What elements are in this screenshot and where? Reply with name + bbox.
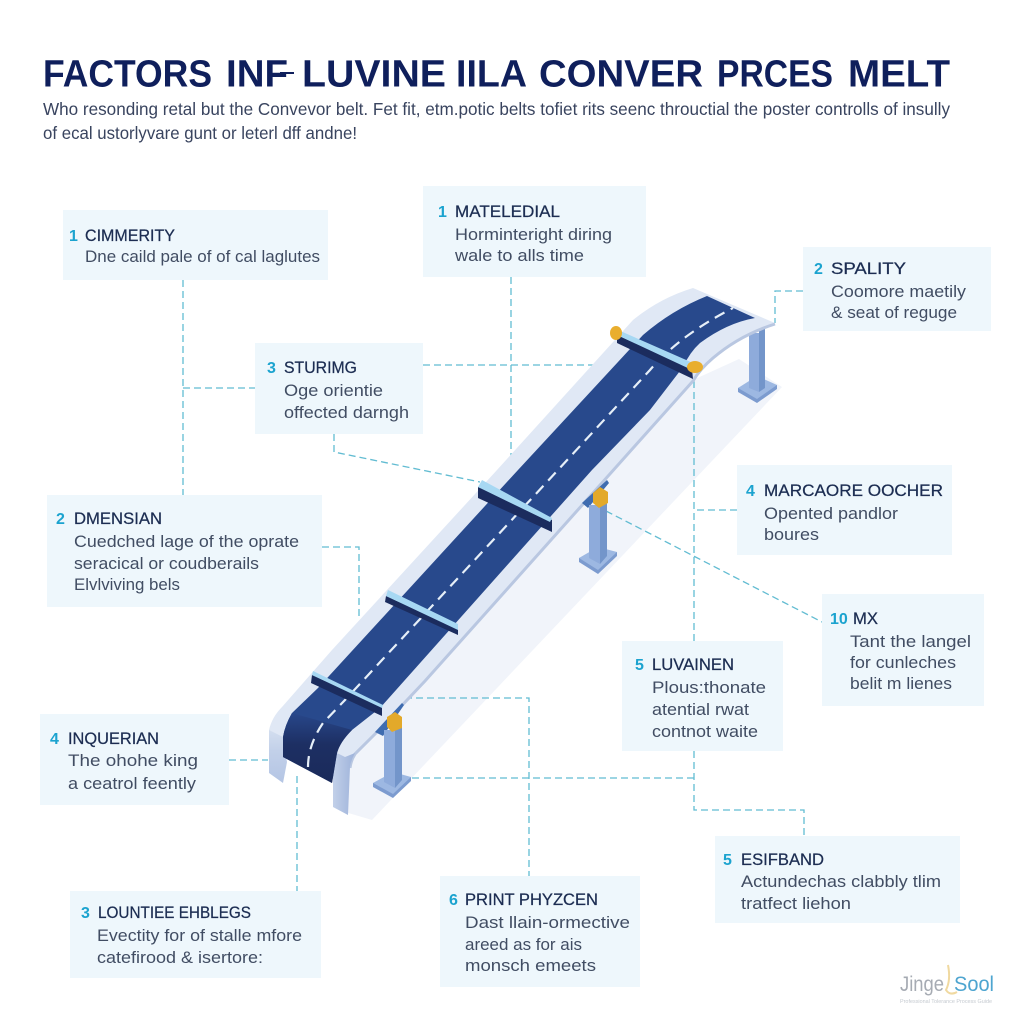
panel: 3 Lountiee Ehblegs: catefirood & isertore: [97,948,263,967]
panel: 3 Sturimg: Oge orientie [284,381,383,400]
panel: 2 Spality [803,247,991,331]
panel: 5 Esifband [715,836,960,923]
panel: 3 Lountiee Ehblegs [70,891,321,978]
title [43,54,950,96]
panel: 2 Spality: & seat of reguge [831,303,957,322]
panel: 10 MX: for cunleches [850,653,956,672]
cross bar 4 [617,330,693,379]
logo [900,965,994,1005]
title: INF [226,54,288,96]
panel: 3 Lountiee Ehblegs: LOUNTIEE EHBLEGS [98,903,251,922]
panel: 3 Sturimg: 3 [267,360,276,377]
panel: 5 Luvainen: atential rwat [652,700,749,719]
panel: 3 Sturimg: STURIMG [284,358,357,377]
panel: 5 Esifband: ESIFBAND [741,850,824,869]
panel: 5 Esifband: tratfect liehon [741,894,851,913]
logo: Professional Tolerance Process Guide [900,999,992,1005]
frame left post [269,730,287,783]
panel: 6 Print Phyzcen: Dast llain-ormective [465,913,630,932]
panel: 1 Mateledial [423,186,646,277]
panel: 6 Print Phyzcen: monsch emeets [465,956,596,975]
panel: 5 Luvainen: 5 [635,657,644,674]
panel: 2 Dmensian: Cuedched lage of the oprate [74,532,299,551]
panel: 2 Dmensian: DMENSIAN [74,509,162,528]
panel: 10 MX [822,594,984,706]
panel: 10 MX: belit m lienes [850,674,952,693]
title: FACTORS [43,54,212,96]
panel: 4 Marcaore Oocher: 4 [746,483,755,500]
cross bar 2 [385,590,458,635]
panel: 10 MX: MX [853,609,878,628]
belt end shading [283,713,352,783]
panel: 6 Print Phyzcen: 6 [449,892,458,909]
panel: 2 Spality: SPALITY [831,259,906,278]
logo: Jinge [900,973,944,996]
panel: 3 Lountiee Ehblegs: Evectity for of stalle mfore [97,926,302,945]
panel: 4 Inquerian: a ceatrol feently [68,774,197,793]
title: LUVINE [302,54,446,96]
panel: 2 Spality: Coomore maetily [831,282,967,301]
panel: 4 Inquerian [40,714,229,805]
panel: 1 Cimmerity: 1 [69,228,78,245]
panel: 4 Marcaore Oocher: boures [764,525,819,544]
navy belt surface [283,296,755,783]
gold fasteners on top bar [610,326,703,373]
panel: 5 Esifband: 5 [723,852,732,869]
title: CONVER [539,54,703,96]
panel: 1 Mateledial: 1 [438,204,447,221]
panel: 4 Marcaore Oocher: MARCAORE OOCHER [764,481,943,500]
panel: 2 Dmensian: 2 [56,511,65,528]
panel: 1 Mateledial: Horminteright diring [455,225,612,244]
panel: 10 MX: 10 [830,611,848,628]
subtitle: of ecal ustorlyvare gunt or leterl dff andne! [43,123,357,143]
cross bar 3 [478,480,552,532]
belt frame surface [269,288,775,770]
panel: 4 Inquerian: INQUERIAN [68,729,159,748]
panel: 6 Print Phyzcen [440,876,640,987]
panel: 2 Dmensian: Elvlviving bels [74,575,180,594]
panel: 5 Luvainen: LUVAINEN [652,655,734,674]
cross bar 1 [311,671,383,716]
panel: 3 Sturimg [255,343,423,434]
panel: 10 MX: Tant the langel [850,632,971,651]
panel: 1 Mateledial: MATELEDIAL [455,202,560,221]
frame right post [333,753,355,815]
floor shadow [345,359,782,820]
panel: 4 Marcaore Oocher: Opented pandlor [764,504,898,523]
panel: 4 Inquerian: The ohohe king [68,751,198,770]
panel: 1 Cimmerity: Dne caild pale of of cal laglutes [85,247,320,266]
panel: 5 Luvainen: contnot waite [652,722,758,741]
panel: 1 Cimmerity [63,210,328,280]
panel: 2 Dmensian: seracical or coudberails [74,554,259,573]
panel: 2 Dmensian [47,495,322,607]
centre dashed line [308,308,733,767]
front support leg [373,703,411,798]
subtitle [43,99,950,143]
panel: 4 Inquerian: 4 [50,731,59,748]
title: MELT [848,54,950,96]
panel: 6 Print Phyzcen: PRINT PHYZCEN [465,890,598,909]
title: IILA [456,54,527,96]
back support leg [738,327,777,403]
panel: 3 Sturimg: offected darngh [284,403,409,422]
panel: 1 Cimmerity: CIMMERITY [85,226,175,245]
panel: 6 Print Phyzcen: areed as for ais [465,935,582,954]
panel: 5 Esifband: Actundechas clabbly tlim [741,872,941,891]
conveyor belt illustration [269,288,777,815]
connector lines [183,277,822,891]
panel: 4 Marcaore Oocher [737,465,952,555]
panel: 3 Lountiee Ehblegs: 3 [81,905,90,922]
panel: 1 Mateledial: wale to alls time [454,246,584,265]
logo: Sool [954,973,994,996]
middle support leg [579,480,617,574]
frame outer edge [350,324,775,768]
subtitle: Who resonding retal but the Convevor belt. Fet fit, etm.potic belts tofiet rits seenc throuctial the poster controlls of insully [43,99,950,119]
panel: 2 Spality: 2 [814,261,823,278]
title: PRCES [717,54,833,96]
panel: 5 Luvainen: Plous:thonate [652,678,766,697]
panel: 5 Luvainen [622,641,783,751]
